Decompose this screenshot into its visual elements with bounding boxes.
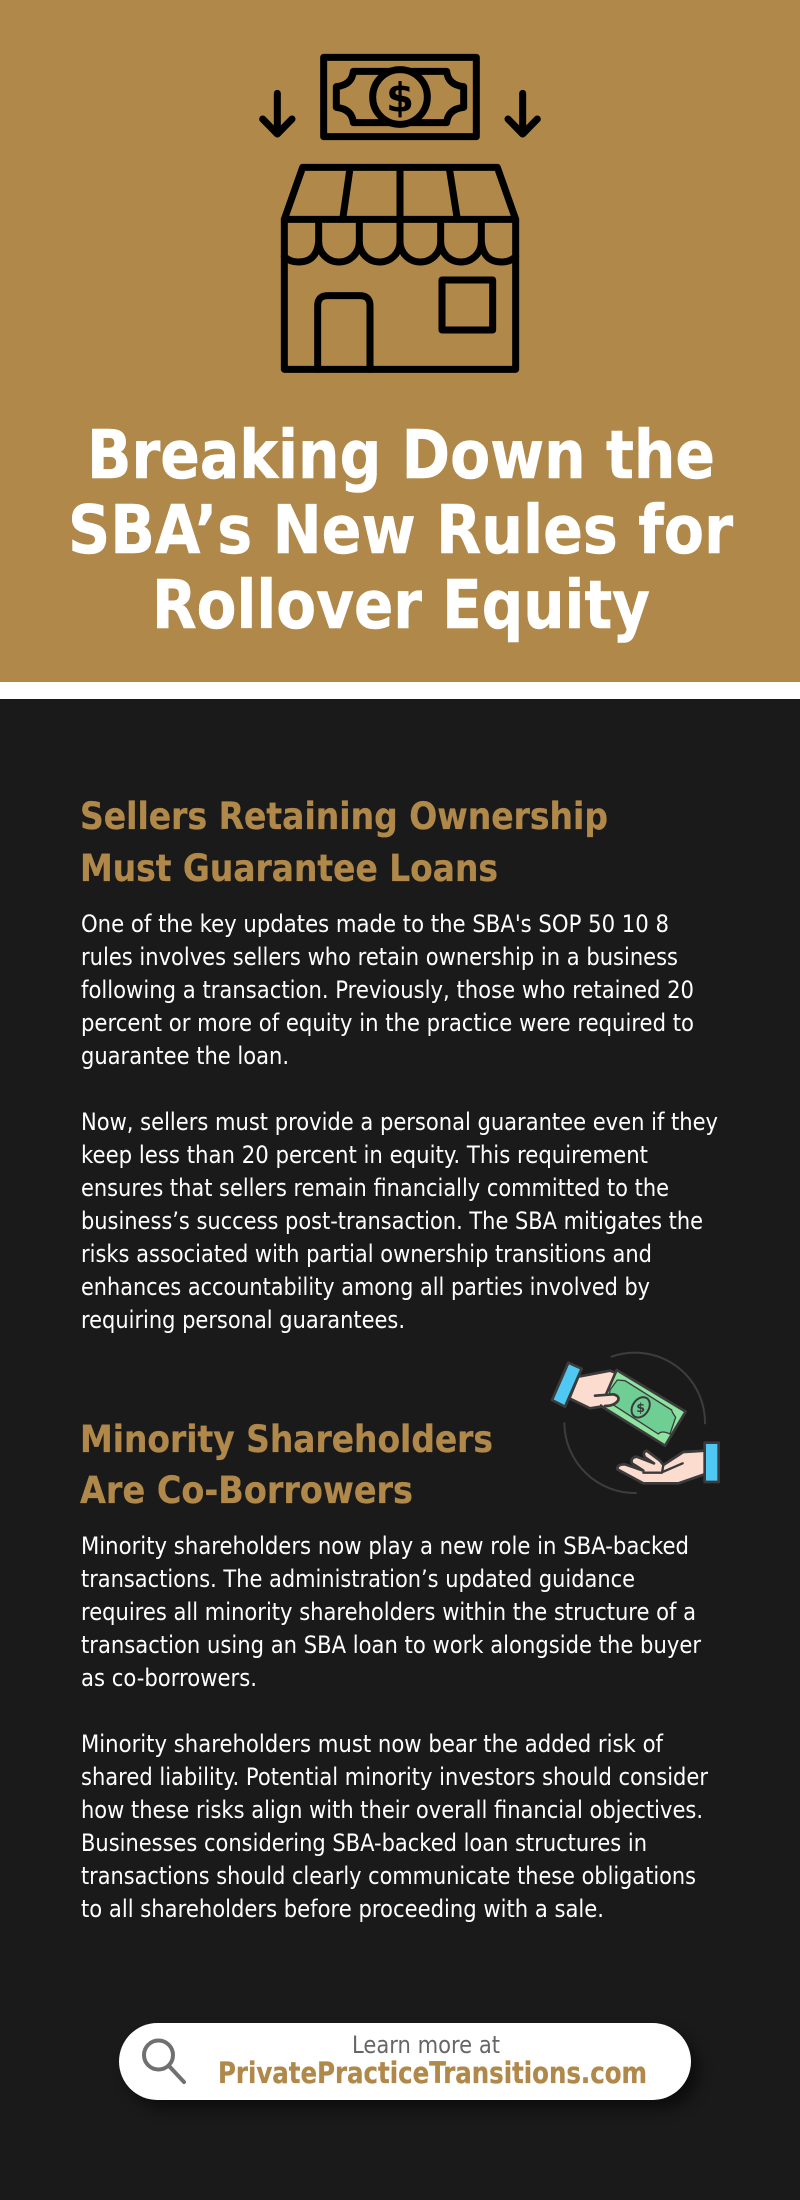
section 2 paragraph 2: to all shareholders before proceeding with a sale. — [81, 1895, 604, 1923]
call to action button — [119, 2023, 699, 2109]
icon: money falling into storefront: $ — [386, 76, 414, 122]
section 1 paragraph 2 — [81, 1108, 718, 1334]
section 2 heading: Minority Shareholders — [80, 1418, 493, 1461]
section 1 paragraph 2: risks associated with partial ownership transitions and — [81, 1240, 652, 1268]
section 2 heading — [80, 1418, 493, 1512]
section 1 paragraph 1: One of the key updates made to the SBA's SOP 50 10 8 — [81, 910, 669, 938]
section 1 paragraph 1: following a transaction. Previously, those who retained 20 — [81, 976, 694, 1004]
title — [68, 416, 733, 644]
section 1 paragraph 2: keep less than 20 percent in equity. This requirement — [81, 1141, 648, 1169]
section 2 paragraph 1: as co-borrowers. — [81, 1664, 257, 1692]
section 2 paragraph 2: Businesses considering SBA-backed loan structures in — [81, 1829, 647, 1857]
section 1 heading: Must Guarantee Loans — [80, 847, 498, 890]
section 1 paragraph 2: Now, sellers must provide a personal guarantee even if they — [81, 1108, 718, 1136]
header panel — [0, 0, 800, 699]
icon: hands exchanging money: $ — [636, 1400, 645, 1415]
icon: magnifying glass — [144, 2040, 184, 2082]
call to action button: Learn more at — [352, 2031, 500, 2059]
section 2 paragraph 2: how these risks align with their overall financial objectives. — [81, 1796, 703, 1824]
section 1 paragraph 1 — [81, 910, 694, 1070]
section 1 paragraph 2: ensures that sellers remain financially committed to the — [81, 1174, 669, 1202]
icon: money falling into storefront — [263, 57, 537, 369]
section 1 paragraph 1: percent or more of equity in the practice were required to — [81, 1009, 694, 1037]
section 2 heading: Are Co-Borrowers — [80, 1469, 413, 1512]
section 2 paragraph 2: transactions should clearly communicate these obligations — [81, 1862, 696, 1890]
icon: hands exchanging money — [552, 1353, 719, 1493]
section 2 paragraph 2: Minority shareholders must now bear the added risk of — [81, 1730, 663, 1758]
section 1 paragraph 2: enhances accountability among all parties involved by — [81, 1273, 650, 1301]
section 2 paragraph 1: requires all minority shareholders within the structure of a — [81, 1598, 696, 1626]
call to action button: PrivatePracticeTransitions.com — [218, 2056, 647, 2090]
title: Breaking Down the — [87, 416, 715, 494]
section 2 paragraph 1: Minority shareholders now play a new role in SBA-backed — [81, 1532, 689, 1560]
section 2 paragraph 2: shared liability. Potential minority investors should consider — [81, 1763, 708, 1791]
section 1 paragraph 1: rules involves sellers who retain ownership in a business — [81, 943, 678, 971]
section 2 paragraph 2 — [81, 1730, 708, 1923]
section 1 paragraph 2: business’s success post-transaction. The SBA mitigates the — [81, 1207, 703, 1235]
section 1 heading — [80, 795, 608, 890]
section 1 heading: Sellers Retaining Ownership — [80, 795, 608, 838]
section 2 paragraph 1: transaction using an SBA loan to work alongside the buyer — [81, 1631, 701, 1659]
section 2 paragraph 1 — [81, 1532, 701, 1692]
section 2 paragraph 1: transactions. The administration’s updated guidance — [81, 1565, 635, 1593]
section 1 paragraph 2: requiring personal guarantees. — [81, 1306, 405, 1334]
title: Rollover Equity — [152, 566, 650, 644]
section 1 paragraph 1: guarantee the loan. — [81, 1042, 289, 1070]
